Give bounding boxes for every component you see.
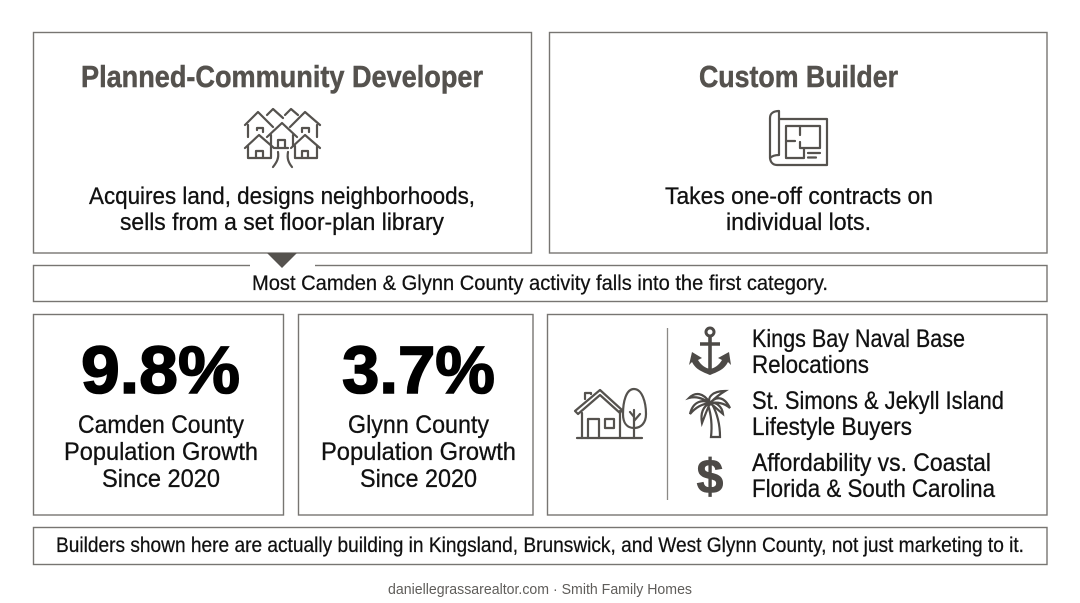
text: builder description: individual lots. <box>726 209 871 236</box>
heading: custom builder: Custom Builder <box>699 59 898 94</box>
text: builder description <box>665 183 933 236</box>
list: demand drivers: Lifestyle Buyers <box>752 413 912 441</box>
label: camden growth: Population Growth <box>64 438 258 466</box>
panel: custom builder <box>550 32 1047 253</box>
panel: demand drivers <box>548 314 1047 515</box>
heading: planned-community developer: Planned-Community Developer <box>81 59 483 94</box>
label: camden growth <box>64 411 258 493</box>
icon: neighborhood houses <box>245 109 320 167</box>
number: 9.8%: 9.8% <box>81 333 240 408</box>
list: demand drivers <box>752 325 1004 503</box>
icon: blueprint <box>770 111 827 165</box>
label: glynn growth: Since 2020 <box>360 465 477 493</box>
panel: camden county stat <box>34 314 284 515</box>
list: demand drivers: Kings Bay Naval Base <box>752 325 965 353</box>
callout strip: first category note <box>34 253 1047 302</box>
number: 3.7%: 3.7% <box>342 333 495 408</box>
list: demand drivers: Florida & South Carolina <box>752 475 995 503</box>
list: demand drivers: Affordability vs. Coastal <box>752 449 991 477</box>
label: glynn growth: Population Growth <box>321 438 516 466</box>
icon: dollar sign: $ <box>697 451 724 504</box>
text: builder description: Takes one-off contracts on <box>665 183 933 210</box>
text: developer description: sells from a set floor-plan library <box>120 209 444 236</box>
footer source: daniellegrassarealtor.com · Smith Family Homes <box>388 582 692 598</box>
callout strip: builders note <box>34 528 1047 564</box>
label: camden growth: Camden County <box>78 411 244 439</box>
label: glynn growth: Glynn County <box>348 411 489 439</box>
icon: palm tree <box>689 391 730 437</box>
label: camden growth: Since 2020 <box>102 465 220 493</box>
icon: house and tree <box>575 389 646 438</box>
text: developer description <box>89 183 475 236</box>
label: glynn growth <box>321 411 516 493</box>
list: demand drivers: Relocations <box>752 351 869 379</box>
text: developer description: Acquires land, designs neighborhoods, <box>89 183 475 210</box>
divider <box>666 328 668 500</box>
list: demand drivers: St. Simons & Jekyll Island <box>752 387 1004 415</box>
panel: planned-community developer <box>34 32 532 253</box>
panel: glynn county stat <box>298 314 533 515</box>
callout strip: first category note: Most Camden & Glynn County activity falls into the first category. <box>252 272 828 295</box>
arrow: pointer down <box>267 253 297 268</box>
icon: anchor <box>689 328 731 375</box>
